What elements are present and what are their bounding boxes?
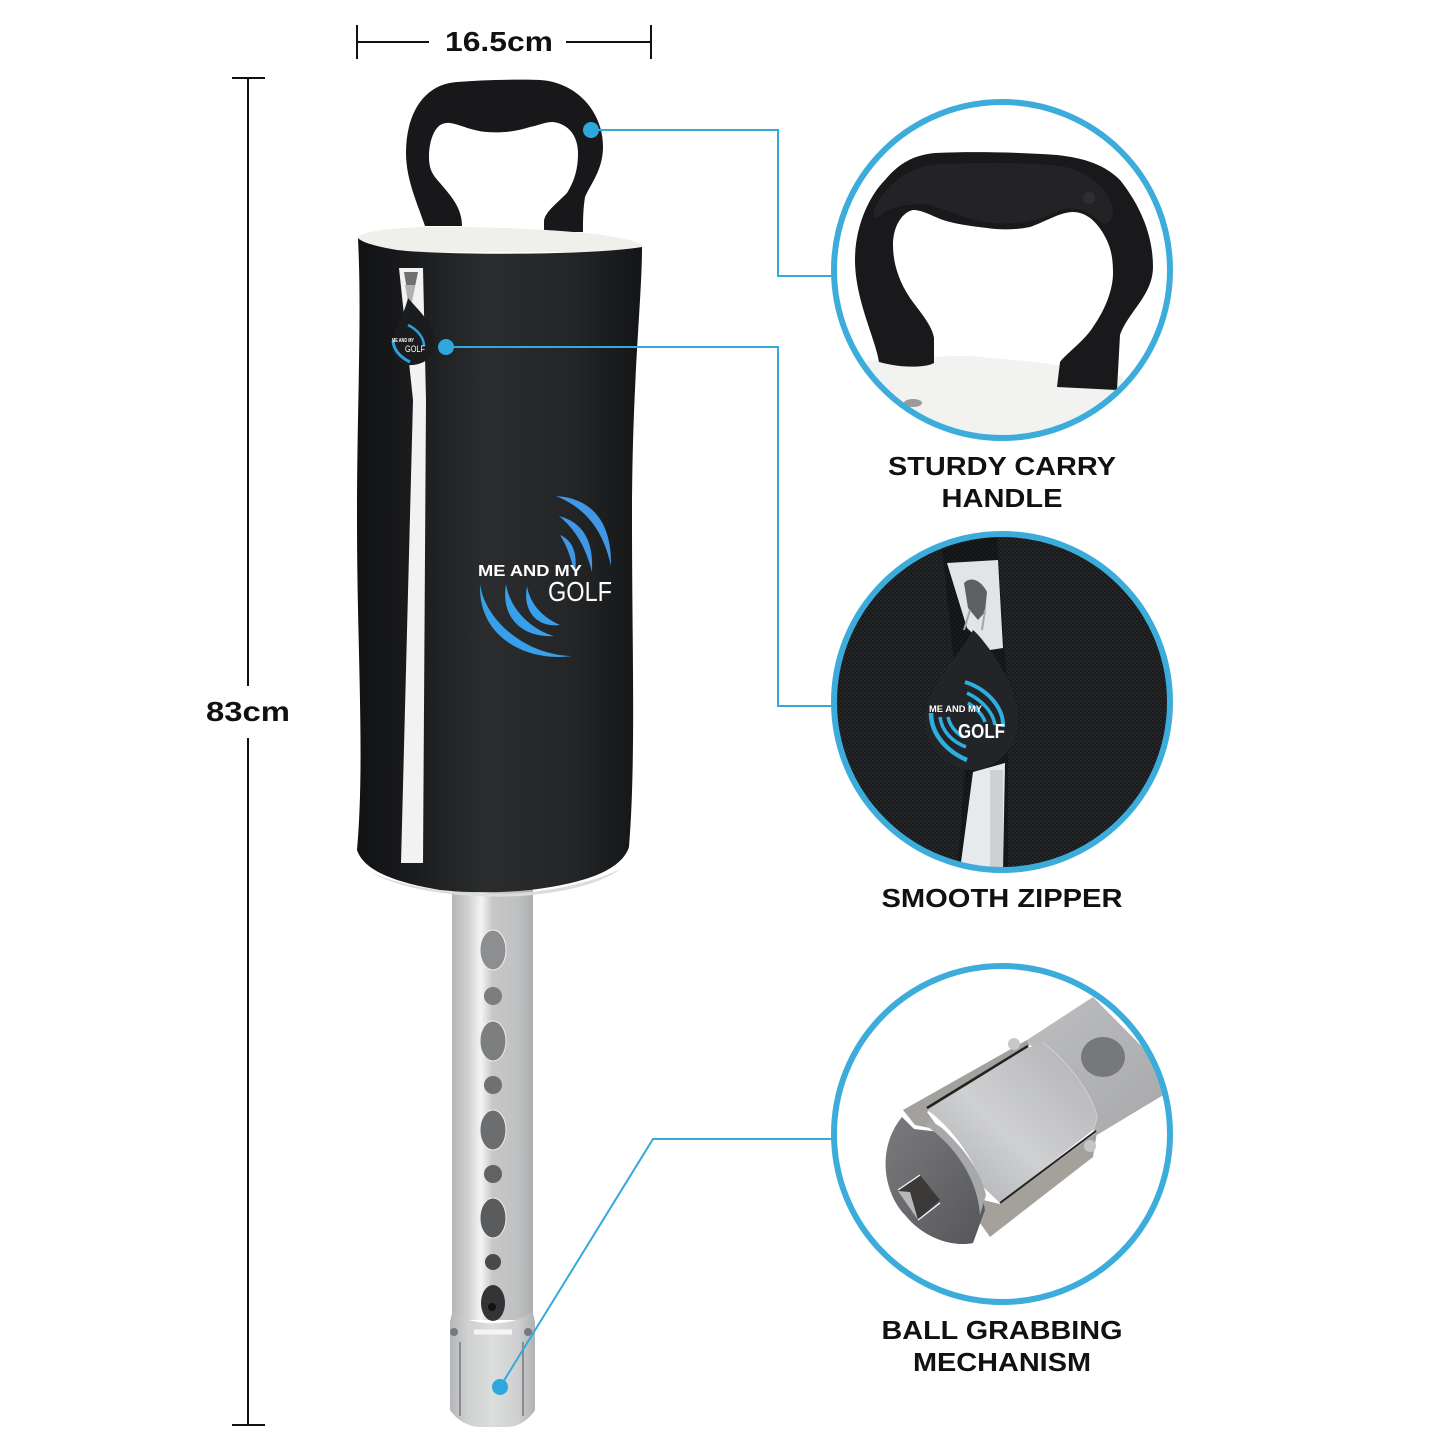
zipper [399, 268, 426, 863]
label: ball grabbing mechanism [882, 1315, 1122, 1377]
notch [898, 1175, 940, 1220]
label: sturdy carry handle [888, 451, 1116, 513]
product: shag bag ball retriever: ME AND MY [392, 338, 415, 344]
label: smooth zipper: SMOOTH ZIPPER [882, 883, 1123, 913]
height dimension: 83cm: 83cm [206, 696, 290, 727]
product: shag bag ball retriever [357, 80, 642, 1427]
detail circle: zipper: ME AND MY [929, 704, 982, 714]
width dimension: 16.5cm [357, 25, 651, 59]
zipper pull tag [925, 630, 1018, 770]
tube holes [480, 930, 506, 1321]
label: ball grabbing mechanism: BALL GRABBING [882, 1315, 1122, 1345]
handle [406, 80, 603, 232]
bag logo: GOLF [548, 576, 612, 607]
bag logo: ME AND MY [478, 563, 582, 580]
marker dots [438, 122, 599, 1395]
width dimension: 16.5cm: 16.5cm [445, 26, 553, 57]
detail circle: handle [834, 102, 1170, 450]
detail circle: zipper: GOLF [958, 721, 1005, 743]
bag rim [358, 227, 642, 252]
tube end cap [450, 1312, 535, 1427]
bag logo [478, 496, 612, 657]
top bracket [903, 1040, 1030, 1130]
leader lines [446, 130, 835, 1387]
detail circle: zipper [834, 534, 1170, 880]
label: ball grabbing mechanism: MECHANISM [913, 1347, 1091, 1377]
zipper tag [392, 298, 435, 365]
upper pipe [1027, 997, 1162, 1135]
detail circle: ball grabbing mechanism [834, 966, 1180, 1302]
bag body [357, 238, 642, 892]
height dimension: 83cm [206, 78, 290, 1425]
label: sturdy carry handle: HANDLE [942, 483, 1062, 513]
product: shag bag ball retriever: GOLF [405, 344, 425, 354]
centre panel [927, 1043, 1097, 1203]
label: sturdy carry handle: STURDY CARRY [888, 451, 1116, 481]
tube [452, 885, 533, 1320]
zipper slider [964, 580, 987, 620]
lower bracket [980, 1132, 1097, 1237]
end disc [886, 1117, 985, 1244]
